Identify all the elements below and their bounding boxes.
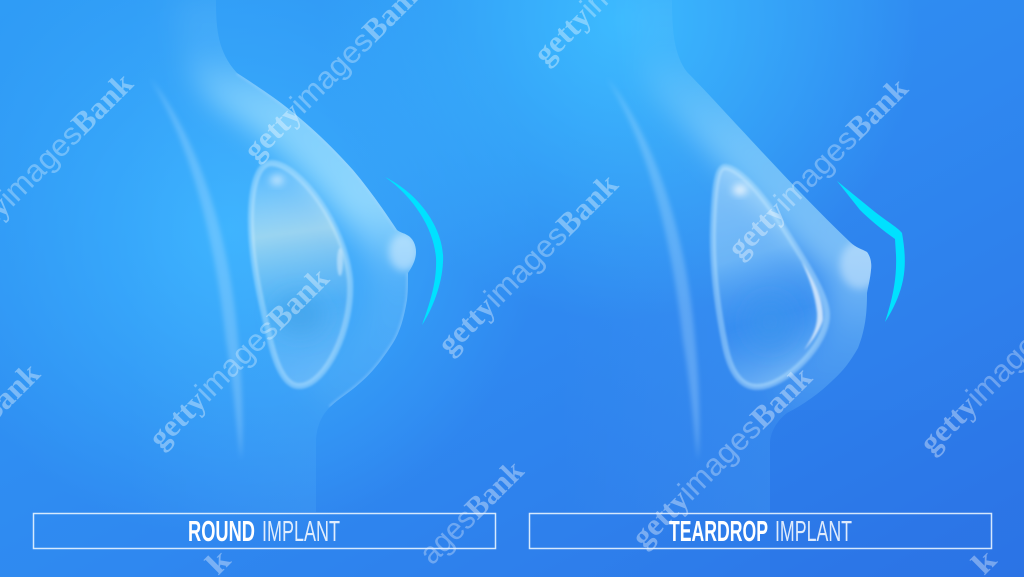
panel: round implant illustration [130, 0, 443, 512]
label: teardrop implant: IMPLANT [775, 516, 852, 548]
round implant [251, 163, 350, 386]
body silhouette [178, 0, 416, 512]
label: round implant: ROUND [188, 516, 255, 548]
watermarks: gettyimagesBank [430, 166, 625, 361]
watermarks: gettyimagesBank [141, 260, 336, 455]
torso line left figure [150, 78, 242, 460]
watermarks: agesBank [412, 452, 531, 571]
curve indicator: round profile [385, 177, 443, 325]
teardrop implant [713, 167, 827, 387]
label: round implant: IMPLANT [262, 516, 340, 548]
torso line right figure [607, 78, 699, 460]
curve indicator: teardrop profile [837, 181, 905, 322]
body silhouette [638, 8, 872, 512]
label: teardrop implant [530, 514, 992, 548]
panel: teardrop implant illustration [611, 8, 905, 512]
watermarks: gettyimagesBank [720, 70, 915, 265]
watermarks: gettyimagesBank [624, 359, 819, 554]
label: teardrop implant: TEARDROP [669, 516, 768, 548]
label: round implant [34, 514, 496, 548]
